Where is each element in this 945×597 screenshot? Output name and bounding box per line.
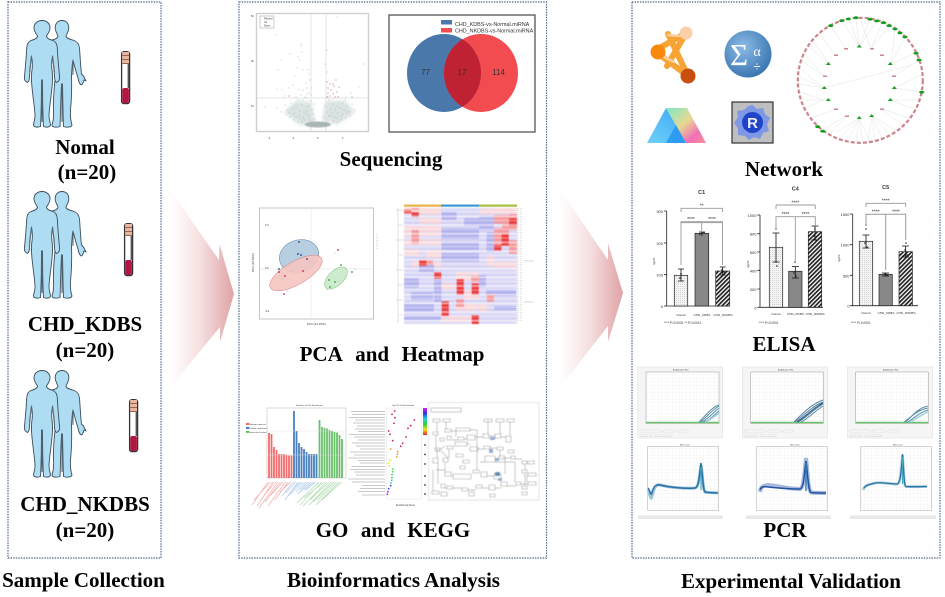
label: experimental validation: Experimental Validation (681, 569, 901, 593)
chart: ELISA C5 (837, 185, 918, 325)
chart: ELISA C4: 600 (750, 250, 757, 255)
chart: ELISA C1: **** (708, 217, 716, 223)
heading: PCA and Heatmap: PCA and Heatmap (300, 342, 484, 366)
chart: ELISA C4 (746, 186, 825, 325)
chart: ELISA C5: C5 (882, 185, 889, 191)
chart: volcano plot: 0 (317, 137, 319, 140)
chart: ELISA C1: CHD_NKDBS (713, 313, 733, 317)
chart: ELISA C4: 0 (754, 305, 757, 310)
chart: ELISA C5: **** P<0.0001 (851, 321, 871, 325)
chart: PCR amplification plot 3: Amplification Plot (883, 368, 899, 372)
chart: venn diagram: CHD_NKDBS-vs-Normal.miRNA (455, 28, 534, 34)
chart: ELISA C5: ng/ml (837, 254, 841, 262)
icon: KDBS group people (24, 192, 86, 298)
heading: NKDBS group: (n=20) (56, 518, 114, 542)
chart: PCA plot: PC2 (18.62%) (251, 253, 255, 272)
heading: GO and KEGG: GO and KEGG (316, 518, 470, 542)
chart: ELISA C4: 800 (750, 232, 757, 237)
heading: normal group: (n=20) (58, 160, 116, 184)
chart: volcano plot: Filtered (264, 18, 273, 20)
chart: venn diagram: CHD_KDBS-vs-Normal.miRNA (455, 22, 530, 28)
icon: SPSS logo: Σ (730, 37, 748, 72)
heading: network: Network (745, 157, 823, 181)
icon: SPSS logo: α (753, 45, 761, 60)
chart: venn diagram: 17 (458, 68, 467, 77)
chart: ELISA C1: 300 (656, 209, 664, 214)
chart: ELISA C5: **** (882, 198, 890, 204)
chart: ELISA C1: ng/ml (652, 257, 656, 265)
chart: ELISA C4: **** (791, 200, 799, 206)
chart: ELISA C5: 500 (843, 273, 850, 278)
heading: KDBS group: CHD_KDBS (28, 312, 142, 336)
chart: PCR melt curve 1: Melt Curve (680, 444, 691, 446)
chart: venn diagram: 77 (421, 68, 430, 77)
chart: ELISA C4: Nomal (772, 312, 781, 316)
icon: normal group blood tube (122, 52, 130, 104)
chart: ELISA C4: ng/ml (746, 260, 750, 268)
chart: PCA plot: -0.4 (265, 310, 270, 313)
chart: PCR melt curve 3: Melt Curve (893, 444, 904, 446)
chart: ELISA C4: 400 (750, 268, 757, 273)
chart: ELISA C5: 0 (847, 304, 850, 309)
chart: ELISA C4: **** (802, 212, 809, 218)
chart: volcano plot: Up (264, 21, 268, 24)
chart: ELISA C5: CHD_NKDBS (896, 311, 916, 315)
chart: ELISA C1 (652, 190, 733, 325)
chart: miRNA network (798, 16, 924, 143)
chart: ELISA C5: Nomal (862, 311, 871, 315)
chart: ELISA C4: 1000 (748, 213, 757, 218)
chart: PCR amplification plot 1 (638, 367, 723, 438)
icon: Cytoscape logo (650, 26, 696, 84)
chart: heatmap (396, 204, 534, 324)
chart: GO enrichment bars: cellular component (250, 427, 267, 430)
icon: R logo (732, 102, 773, 143)
chart: volcano plot: Down (264, 24, 271, 28)
heading: sequencing: Sequencing (340, 147, 443, 171)
chart: ELISA C1: **** P<0.0001 ** P=0.0011 (664, 321, 702, 325)
chart: GO dot plot (348, 404, 427, 507)
chart: KEGG pathway (428, 402, 539, 500)
chart: GO dot plot: Enrichment Score (396, 504, 416, 507)
chart: GO enrichment bars: Statistics of GO Enrichment (296, 404, 323, 407)
chart: PCA plot (251, 208, 377, 326)
heading: normal group: Nomal (55, 135, 115, 159)
panel: sample collection (8, 2, 161, 558)
heading: normal group (55, 135, 116, 184)
chart: PCR melt curve 3 (850, 444, 936, 519)
heading: KDBS group: (n=20) (56, 338, 114, 362)
chart: ELISA C4: **** P<0.0001 (759, 321, 779, 325)
chart: ELISA C5: **** (892, 210, 900, 216)
chart: volcano plot: 2 (342, 137, 344, 140)
chart: ELISA C1: **** (687, 217, 695, 223)
chart: volcano plot: 10 (251, 105, 254, 108)
icon: Prism logo (647, 108, 706, 143)
heading: PCR: PCR (763, 518, 807, 542)
chart: PCR melt curve 2 (746, 444, 831, 519)
chart: ELISA C1: ** (700, 204, 704, 210)
chart: PCR amplification plot 2 (742, 367, 828, 438)
chart: ELISA C5: **** (872, 210, 880, 216)
icon: R logo: R (747, 115, 758, 132)
chart: GO enrichment bars: biological process (250, 424, 266, 426)
chart: ELISA C5: 1000 (841, 243, 850, 248)
chart: ELISA C5: CHD_KDBS (878, 311, 894, 315)
panel: experimental validation (632, 2, 940, 558)
chart: PCA plot: PC1 (41.97%) (307, 322, 326, 326)
chart: ELISA C4: C4 (792, 186, 800, 192)
chart: ELISA C1: 100 (656, 273, 664, 278)
icon: KDBS group blood tube (125, 224, 133, 276)
icon: normal group people (24, 20, 86, 127)
chart: volcano plot: 30 (251, 60, 254, 63)
chart: ELISA C4: **** (782, 212, 789, 218)
chart: volcano plot: -4 (268, 137, 271, 140)
arrow: bioinformatics to validation (558, 187, 623, 390)
chart: ELISA C5: 1500 (841, 212, 850, 217)
chart: ELISA C4: CHD_NKDBS (805, 312, 825, 316)
chart: ELISA C4: CHD_KDBS (787, 312, 804, 316)
chart: PCR amplification plot 1: Amplification Plot (673, 368, 689, 372)
icon: NKDBS group people (24, 370, 86, 477)
chart: PCA plot: 0.0 (265, 267, 269, 270)
chart: PCR amplification plot 3 (847, 367, 933, 438)
chart: ELISA C1: Nomal (677, 313, 686, 317)
chart: ELISA C1: 0 (661, 304, 664, 309)
panel: bioinformatics analysis (239, 2, 546, 558)
icon: NKDBS group blood tube (130, 400, 138, 452)
chart: venn diagram: 114 (492, 68, 505, 77)
icon: SPSS logo (724, 30, 772, 78)
icon: SPSS logo: ÷ (753, 59, 761, 74)
heading: NKDBS group (20, 492, 150, 542)
chart: PCR melt curve 2: Melt Curve (790, 444, 801, 446)
chart: venn diagram (389, 15, 535, 132)
chart: PCR amplification plot 2: Amplification Plot (778, 368, 794, 372)
chart: GO enrichment bars (246, 404, 346, 508)
chart: PCR melt curve 1 (638, 444, 723, 519)
heading: ELISA: ELISA (752, 332, 816, 356)
chart: volcano plot: -2 (292, 137, 295, 140)
arrow: collection to bioinformatics (168, 187, 234, 390)
label: bioinformatics analysis: Bioinformatics Analysis (287, 568, 500, 592)
chart: PCA plot: 0.4 (265, 224, 269, 227)
heading: NKDBS group: CHD_NKDBS (20, 492, 150, 516)
chart: ELISA C4: 200 (750, 287, 757, 292)
label: sample collection: Sample Collection (2, 568, 165, 592)
chart: GO dot plot: Top 30 GO Enrichment (392, 404, 415, 407)
chart: volcano plot (251, 4, 368, 140)
chart: GO enrichment bars: molecular function (250, 431, 266, 434)
chart: volcano plot: 50 (251, 15, 254, 18)
chart: ELISA C1: C1 (698, 190, 705, 196)
chart: ELISA C1: 200 (656, 241, 664, 246)
heading: KDBS group (28, 312, 142, 362)
chart: ELISA C1: CHD_KDBS (694, 313, 710, 317)
